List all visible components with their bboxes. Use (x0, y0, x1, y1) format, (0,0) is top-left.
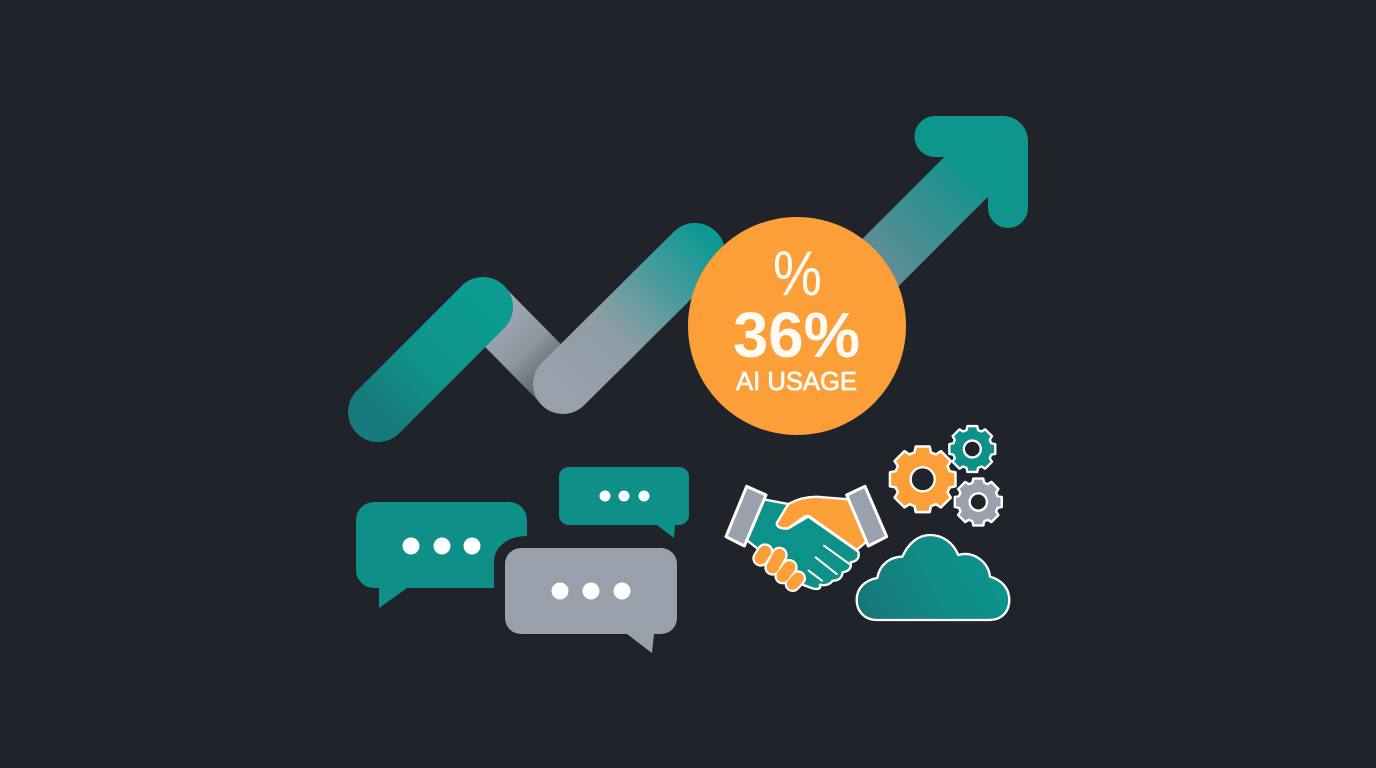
trend segment: grey to teal rising (563, 253, 695, 384)
rising trend arrow (378, 116, 1028, 412)
left cuff (726, 486, 766, 546)
icon: gears (890, 426, 1002, 525)
badge circle (688, 217, 906, 435)
teal hand (747, 499, 859, 589)
orange hand (777, 497, 867, 550)
arrow head (914, 116, 1028, 228)
trend segment: grey descending (485, 307, 560, 383)
teal gear (949, 426, 995, 472)
grey gear (955, 479, 1002, 525)
teal small bubble (559, 467, 689, 538)
icon: cloud (857, 535, 1009, 620)
finger creases (809, 546, 849, 581)
percent symbol: % (773, 239, 822, 309)
trend segment: teal first rise (378, 307, 483, 412)
orange gear (890, 447, 955, 512)
orange stat badge (688, 217, 906, 435)
teal large bubble (356, 502, 527, 608)
right cuff (847, 486, 887, 546)
value: 36%: 36% (733, 299, 860, 371)
grey bubble (505, 548, 677, 653)
arrow shaft (800, 143, 1000, 343)
speech bubbles (356, 467, 689, 653)
icon: handshake (726, 486, 887, 589)
label: AI USAGE: AI USAGE (736, 366, 857, 396)
orange fingers (761, 552, 798, 584)
